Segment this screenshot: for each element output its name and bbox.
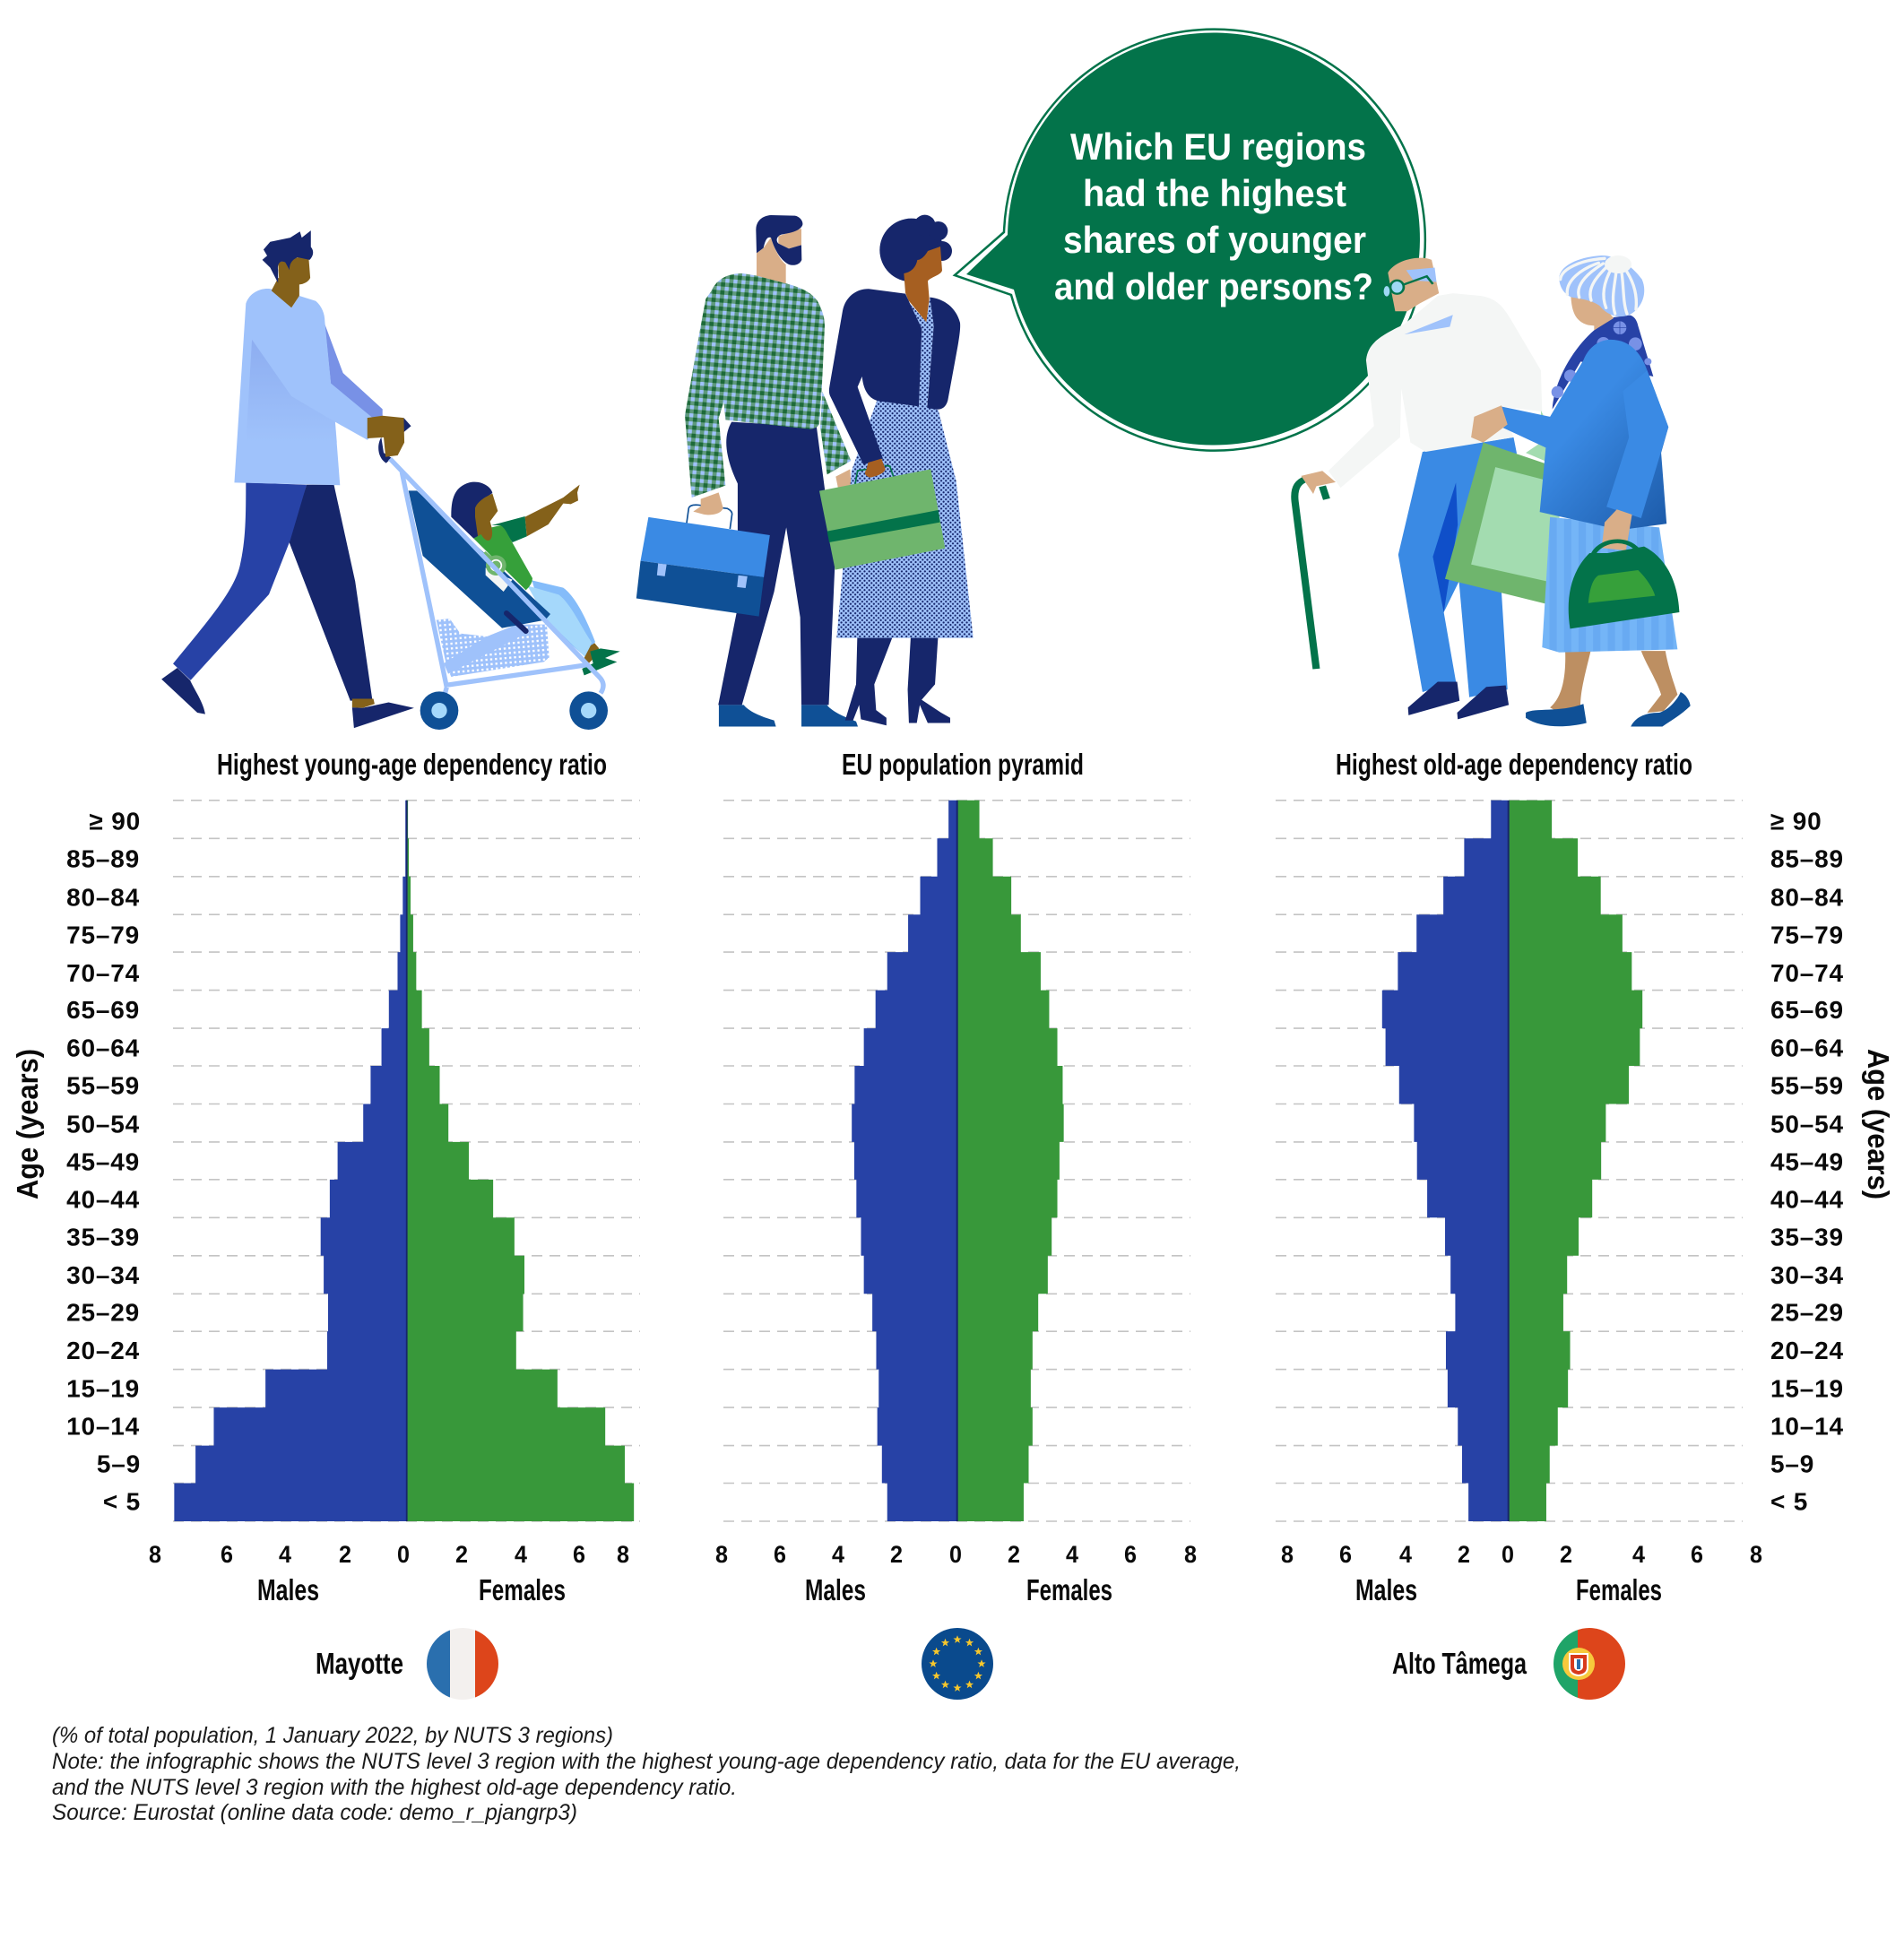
age labels: right: 40–44 — [1770, 1185, 1844, 1213]
x axis ticks: Mayotte: 6 — [221, 1541, 233, 1568]
x axis ticks: EU: 6 — [1124, 1541, 1137, 1568]
age labels: right: < 5 — [1770, 1487, 1808, 1515]
father's far arm — [325, 325, 383, 426]
father's hand on handle — [368, 416, 411, 463]
old woman's hair bun — [1605, 255, 1631, 273]
father's head and hair — [263, 230, 313, 307]
x axis ticks: Mayotte: 4 — [515, 1541, 527, 1568]
x axis ticks: EU: 0 — [949, 1541, 962, 1568]
region label: Alto Tamega: Alto Tâmega — [1392, 1647, 1527, 1680]
old man's trousers — [1398, 437, 1517, 697]
x axis ticks: Alto Tamega: 2 — [1560, 1541, 1572, 1568]
stroller basket — [437, 619, 550, 677]
age labels: right: 25–29 — [1770, 1299, 1844, 1327]
child's trousers highlight — [527, 585, 592, 657]
sex labels: Mayotte: Males — [257, 1573, 319, 1606]
woman's face — [904, 247, 942, 322]
x axis ticks: Mayotte: 6 — [573, 1541, 585, 1568]
region label: Mayotte: Mayotte — [316, 1647, 403, 1680]
age labels: left: 85–89 — [66, 844, 140, 872]
x axis ticks: Mayotte: 2 — [339, 1541, 351, 1568]
x axis ticks: Mayotte — [149, 1541, 629, 1568]
x axis ticks: EU: 8 — [715, 1541, 728, 1568]
child's trousers — [532, 580, 595, 657]
centre axis — [1508, 801, 1510, 1521]
age labels: left: 15–19 — [66, 1375, 140, 1403]
old woman's head and hair — [1559, 255, 1644, 330]
old woman's legs — [1550, 651, 1677, 713]
age labels: left: 40–44 — [66, 1185, 140, 1213]
woman's legs and boots — [845, 637, 950, 725]
x axis ticks: EU — [715, 1541, 1197, 1568]
speech bubble question text: and older persons? — [1054, 265, 1373, 307]
child's arm pointing — [525, 485, 580, 536]
footnote: Source: Eurostat (online data code: demo_r_pjangrp3) — [52, 1800, 577, 1825]
males bars — [174, 801, 407, 1521]
speech bubble question text: had the highest — [1083, 172, 1346, 214]
pyramid: EU — [723, 801, 1190, 1521]
x axis ticks: Alto Tamega: 8 — [1750, 1541, 1762, 1568]
patterned scarf — [1552, 316, 1653, 410]
man's far sleeve — [820, 392, 851, 474]
centre axis — [406, 801, 408, 1521]
old man's hair — [1406, 267, 1436, 282]
age labels: left: 65–69 — [66, 996, 140, 1024]
sex labels: Mayotte: Females — [479, 1573, 566, 1606]
age labels: left — [66, 807, 141, 1515]
father's shirt — [234, 289, 383, 485]
axis title: right: Age (years) — [1862, 1049, 1895, 1199]
icon: EU flag — [922, 1628, 993, 1700]
age labels: left: 10–14 — [66, 1413, 140, 1441]
handbag — [1569, 541, 1679, 628]
briefcase — [636, 517, 770, 617]
x axis ticks: Mayotte: 2 — [455, 1541, 468, 1568]
age labels: left: 25–29 — [66, 1299, 140, 1327]
old man's jumper — [1328, 293, 1542, 488]
stroller seat — [409, 490, 550, 628]
x axis ticks: EU: 6 — [774, 1541, 786, 1568]
illustration: couple with briefcase and shopping bag — [636, 215, 974, 726]
coat sleeve — [1606, 370, 1668, 518]
speech bubble question text: Which EU regions — [1070, 126, 1366, 168]
shopping bag with green stripe — [819, 469, 945, 570]
x axis ticks: Mayotte: 8 — [617, 1541, 629, 1568]
elderly man, bag and woman's lower body — [1294, 258, 1691, 726]
age labels: left: 45–49 — [66, 1147, 140, 1176]
x axis ticks: Alto Tamega: 8 — [1281, 1541, 1294, 1568]
shopping bag handle — [855, 465, 894, 484]
age labels: right: 35–39 — [1770, 1223, 1844, 1251]
age labels: right: 60–64 — [1770, 1034, 1844, 1062]
age labels: right — [1770, 807, 1844, 1515]
child's face — [475, 494, 498, 544]
x axis ticks: Alto Tamega: 4 — [1632, 1541, 1645, 1568]
man's shoes — [719, 705, 858, 726]
glasses — [1384, 276, 1432, 297]
sex labels: EU: Males — [805, 1573, 866, 1606]
old woman's shoes — [1526, 692, 1691, 726]
father's front shoe — [161, 668, 205, 714]
age labels: right: 15–19 — [1770, 1375, 1844, 1403]
shirt shading — [246, 340, 337, 443]
old man's hand on cane — [1301, 471, 1336, 494]
stroller footrest bar — [506, 613, 526, 631]
woman's upper body and bag — [819, 215, 974, 638]
centre axis — [956, 801, 958, 1521]
child's foot — [582, 643, 620, 675]
speech bubble question text — [1054, 126, 1373, 307]
woman's dotted dress — [836, 298, 974, 638]
stroller strut — [444, 625, 526, 674]
sex labels: Alto Tamega — [1355, 1573, 1662, 1606]
chart title: EU: EU population pyramid — [842, 748, 1084, 781]
sex labels: Mayotte — [257, 1573, 566, 1606]
age labels: right: ≥ 90 — [1770, 807, 1822, 835]
sex labels: Alto Tamega: Females — [1576, 1573, 1662, 1606]
man's hands — [693, 469, 851, 515]
x axis ticks: EU: 2 — [1008, 1541, 1020, 1568]
old woman's hair base — [1559, 255, 1644, 316]
age labels: right: 65–69 — [1770, 996, 1844, 1024]
x axis ticks: Alto Tamega: 6 — [1691, 1541, 1703, 1568]
icon: Portuguese flag — [1553, 1628, 1625, 1700]
age labels: left: 50–54 — [66, 1111, 140, 1138]
footnote: Note: the infographic shows the NUTS level 3 region with the highest young-age dependency ratio, data for the EU average, — [52, 1749, 1241, 1774]
age labels: right: 5–9 — [1770, 1450, 1814, 1477]
man's checked shirt — [685, 273, 825, 498]
x axis ticks: Mayotte: 0 — [397, 1541, 410, 1568]
man's neck and face — [757, 229, 801, 285]
woman's jacket left — [829, 289, 922, 464]
large shopping bag — [1445, 411, 1559, 607]
pyramid: Mayotte — [173, 801, 640, 1521]
illustration: father pushing stroller with child — [161, 230, 620, 730]
age labels: right: 75–79 — [1770, 921, 1844, 948]
x axis ticks: Alto Tamega: 0 — [1502, 1541, 1514, 1568]
man's hair and beard — [756, 215, 802, 265]
age labels: left: 20–24 — [66, 1337, 140, 1364]
pyramid: Alto Tamega — [1276, 801, 1743, 1521]
age labels: right: 20–24 — [1770, 1337, 1844, 1364]
females bars — [957, 801, 1064, 1521]
illustration: elderly couple — [1294, 255, 1691, 726]
age labels: left: 75–79 — [66, 921, 140, 948]
x axis ticks: EU: 2 — [890, 1541, 903, 1568]
x axis ticks: EU: 4 — [1066, 1541, 1078, 1568]
father's back leg — [289, 485, 372, 701]
icon: French flag — [427, 1628, 498, 1700]
man's trousers — [718, 422, 835, 705]
age labels: left: 30–34 — [66, 1261, 140, 1289]
briefcase handle — [687, 505, 732, 529]
footnote — [52, 1723, 1241, 1825]
trouser shadow — [1432, 482, 1458, 612]
chart title: young-age: Highest young-age dependency ratio — [217, 748, 607, 781]
chart title: old-age: Highest old-age dependency ratio — [1336, 748, 1692, 781]
age labels: left: 70–74 — [66, 959, 140, 987]
females bars — [407, 801, 634, 1521]
stroller frame — [390, 459, 603, 695]
age labels: right: 70–74 — [1770, 959, 1844, 987]
child's hair — [451, 482, 492, 539]
x axis ticks: Alto Tamega — [1281, 1541, 1762, 1568]
child's shirt — [473, 525, 532, 590]
age labels: left: ≥ 90 — [90, 807, 141, 835]
sex labels: EU — [805, 1573, 1112, 1606]
footnote: (% of total population, 1 January 2022, by NUTS 3 regions) — [52, 1723, 613, 1748]
old woman's face — [1571, 296, 1614, 330]
father — [161, 230, 414, 728]
axis title: left: Age (years) — [11, 1049, 44, 1199]
old man's shoes — [1408, 682, 1509, 719]
age labels: left: 80–84 — [66, 884, 140, 911]
old woman's hair stripes — [1561, 258, 1636, 314]
age labels: right: 55–59 — [1770, 1072, 1844, 1100]
speech bubble question text: shares of younger — [1063, 219, 1366, 261]
females bars — [1509, 801, 1642, 1521]
age labels: right: 80–84 — [1770, 884, 1844, 911]
safety clip — [481, 551, 513, 592]
father's front leg — [173, 482, 307, 680]
x axis ticks: EU: 8 — [1184, 1541, 1197, 1568]
stroller and child — [390, 459, 620, 730]
age labels: right: 85–89 — [1770, 844, 1844, 872]
x axis ticks: Alto Tamega: 6 — [1339, 1541, 1352, 1568]
man's shirt and hands — [685, 273, 851, 529]
footnote: and the NUTS level 3 region with the highest old-age dependency ratio. — [52, 1775, 737, 1800]
sex labels: EU: Females — [1026, 1573, 1112, 1606]
age labels: left: 55–59 — [66, 1072, 140, 1100]
old woman's coat — [1502, 340, 1668, 530]
man's head — [756, 215, 802, 285]
x axis ticks: Mayotte: 4 — [279, 1541, 291, 1568]
x axis ticks: Alto Tamega: 2 — [1458, 1541, 1470, 1568]
woman's hair — [879, 215, 952, 281]
age labels: right: 10–14 — [1770, 1413, 1844, 1441]
age labels: left: < 5 — [103, 1487, 141, 1515]
old man's collar — [1405, 315, 1453, 334]
age labels: right: 30–34 — [1770, 1261, 1844, 1289]
woman's jacket right — [927, 298, 960, 410]
age labels: left: 5–9 — [97, 1450, 141, 1477]
pleated skirt — [1542, 517, 1677, 653]
stroller wheels — [420, 691, 608, 730]
old man's head — [1388, 258, 1439, 311]
cane — [1294, 479, 1327, 669]
x axis ticks: EU: 4 — [832, 1541, 844, 1568]
old woman's coat, hands and handbag — [1471, 340, 1679, 628]
age labels: right: 45–49 — [1770, 1147, 1844, 1176]
sex labels: Alto Tamega: Males — [1355, 1573, 1417, 1606]
age labels: left: 35–39 — [66, 1223, 140, 1251]
age labels: right: 50–54 — [1770, 1111, 1844, 1138]
x axis ticks: Mayotte: 8 — [149, 1541, 161, 1568]
father's back foot — [352, 698, 414, 728]
speech bubble — [955, 30, 1425, 451]
males bars — [852, 801, 957, 1521]
x axis ticks: Alto Tamega: 4 — [1399, 1541, 1412, 1568]
old woman's hands — [1471, 405, 1632, 550]
males bars — [1382, 801, 1509, 1521]
child's sleeve — [491, 516, 527, 542]
man's lower body — [636, 422, 858, 726]
age labels: left: 60–64 — [66, 1034, 140, 1062]
woman's hand — [865, 459, 886, 478]
